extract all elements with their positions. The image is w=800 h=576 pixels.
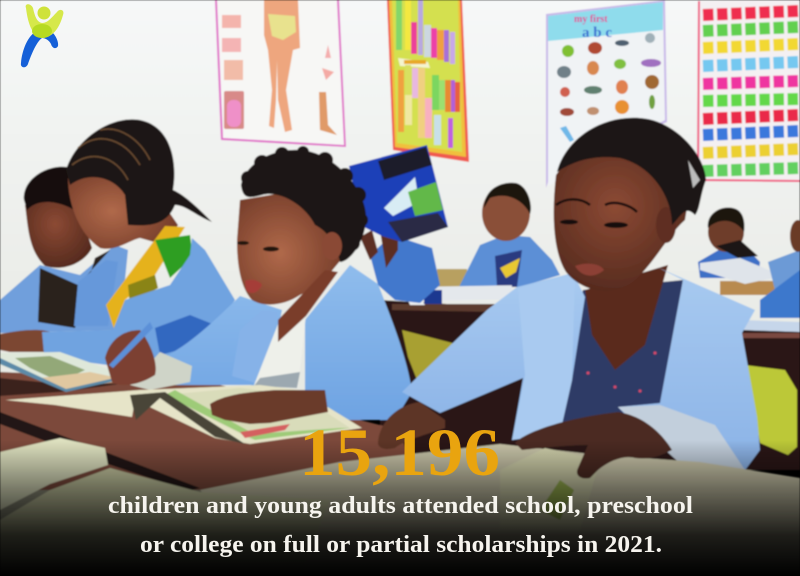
boy centre [105, 146, 412, 420]
hair [241, 146, 368, 262]
back child in the middle [402, 183, 560, 305]
jacket right [618, 267, 760, 473]
logo: running figure [21, 4, 63, 67]
foreground open book pages [0, 438, 800, 576]
book under pen hand [0, 352, 128, 390]
girl right hand on page [515, 412, 672, 479]
jacket left [402, 273, 585, 440]
jacket [42, 238, 235, 370]
big open book [5, 385, 362, 444]
poster: my first abc: a b c [582, 25, 612, 41]
back row desk and dark floor area [380, 300, 800, 470]
caption line 1: children and young adults attended school, preschool [108, 493, 693, 519]
back child right [698, 208, 800, 332]
jacket [160, 265, 412, 420]
yellow green collar [106, 226, 185, 332]
poster: number grid [698, 0, 800, 181]
poster: my first abc: my first [574, 14, 608, 25]
face [237, 190, 345, 305]
poster: colourful chart [387, 0, 469, 162]
sleeve cuff [130, 352, 192, 390]
wall background [0, 0, 800, 400]
table top [0, 372, 420, 500]
yellow chairs [402, 330, 468, 380]
right girl [378, 118, 760, 473]
hair [557, 118, 706, 225]
neck and shirt [560, 280, 683, 435]
face [554, 150, 690, 291]
poster: my first abc [546, 0, 667, 188]
caption line 2: or college on full or partial scholarships in 2021. [140, 532, 662, 558]
girl with braids [42, 119, 235, 370]
dark gradient overlay [0, 440, 800, 576]
left boy [0, 167, 128, 352]
hand with pen [105, 330, 156, 385]
poster: human body chart [215, 0, 346, 147]
stat number: 15,196 [299, 414, 500, 490]
left hand [378, 402, 445, 449]
child holding a book [349, 145, 448, 303]
book cover held up [349, 145, 448, 242]
